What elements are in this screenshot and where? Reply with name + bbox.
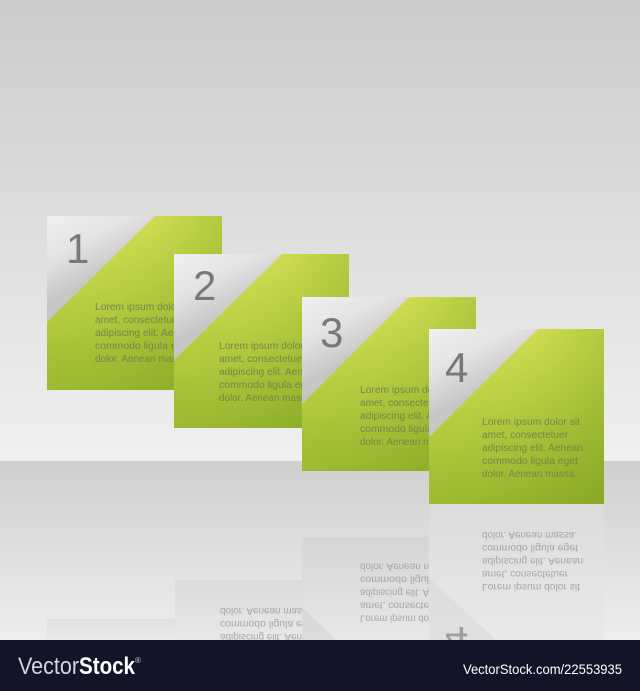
number 2: 2 [193,262,216,309]
card 2 text: adipiscing elit. Aenean [219,367,320,378]
card 3 text: adipiscing elit. Aenean [360,411,461,422]
card 4 text: dolor. Aenean massa. [482,469,577,480]
reflection: card 4: adipiscing elit. Aenean [482,555,583,566]
footer logo: Stock [79,653,136,680]
reflection: card 4: commodo ligula eget [482,542,578,553]
card 2 text: dolor. Aenean massa. [219,393,314,404]
card 3 text: Lorem ipsum dolor sit [360,385,458,396]
card 3 text: commodo ligula eget [360,424,456,435]
card 1 text: amet, consectetuer [95,315,182,326]
reflection: card 3 [360,564,429,623]
card 4 text: amet, consectetuer [482,430,569,441]
reflection: card 3: amet, consecte [360,600,429,610]
reflection: card 1 [47,619,175,628]
card 1 text: dolor. Aenean massa. [95,354,190,365]
reflection: card 4 [429,532,582,640]
footer logo: ® [135,656,141,665]
card 2 text: Lorem ipsum dolor sit [219,341,317,352]
number 3: 3 [320,309,343,356]
card 3 text [360,385,461,448]
footer bar [0,640,640,691]
reflection: card 3: Lorem ipsum do [360,612,429,624]
card 1 text [95,302,196,365]
footer logo: Vector [18,653,79,680]
card 4 text: commodo ligula eget [482,456,578,467]
reflection: card 3: adipiscing elit. A [360,586,429,598]
reflection: card 2: commodo ligula e [220,618,302,629]
card 1 text: commodo ligula eget [95,341,191,352]
card 2 text [219,341,320,404]
card 2 text: commodo ligula eget [219,380,315,391]
floor [0,461,640,640]
reflection: card 4: Lorem ipsum dolor sit [482,581,580,592]
footer logo [18,653,141,680]
reflection: card 2: adipiscing elit. Aen [220,631,302,642]
reflections on the floor [47,532,582,640]
reflection: card 4: amet, consectetuer [482,568,569,579]
reflection: card 3: dolor. Aenean n [360,560,429,572]
reflection: card 3: commodo ligul [360,574,429,584]
number 4: 4 [445,344,468,391]
card 3 text: amet, consectetuer [360,398,447,409]
background wall [0,0,640,461]
card 1 text: adipiscing elit. Aenean [95,328,196,339]
card 4 text [482,417,583,480]
reflection: card 4: 4 [445,618,468,665]
card 1 text: Lorem ipsum dolor sit [95,302,193,313]
reflection: card 2 [175,580,336,642]
card 2 [174,254,349,428]
card 4 text: adipiscing elit. Aenean [482,443,583,454]
card 1 [47,216,222,390]
card 4 [429,329,604,504]
reflection: card 4: dolor. Aenean massa. [482,529,577,540]
card 2 text: amet, consectetuer [219,354,306,365]
footer url: VectorStock.com/22553935 [463,661,622,677]
card 3 [302,297,476,471]
card 4 text: Lorem ipsum dolor sit [482,417,580,428]
number 1: 1 [66,225,89,272]
reflection: card 2: dolor. Aenean mas [220,605,302,616]
card 3 text: dolor. Aenean massa. [360,437,455,448]
